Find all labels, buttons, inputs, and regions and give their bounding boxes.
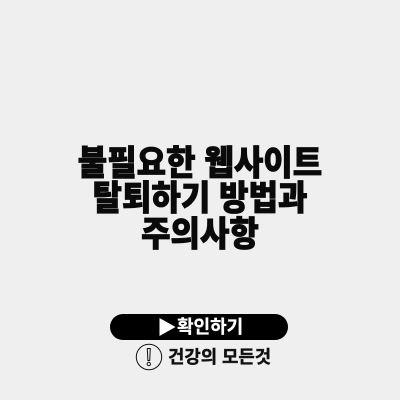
- brand label: 건강의 모든것: [168, 347, 271, 367]
- button: confirm: [110, 314, 288, 340]
- title: [78, 144, 322, 253]
- button: confirm: 확인하기: [177, 317, 243, 337]
- title: 주의사항: [141, 215, 259, 253]
- title: 불필요한 웹사이트: [78, 144, 322, 182]
- title: 탈퇴하기 방법과: [92, 179, 307, 217]
- icon: exclamation circle: [136, 344, 162, 370]
